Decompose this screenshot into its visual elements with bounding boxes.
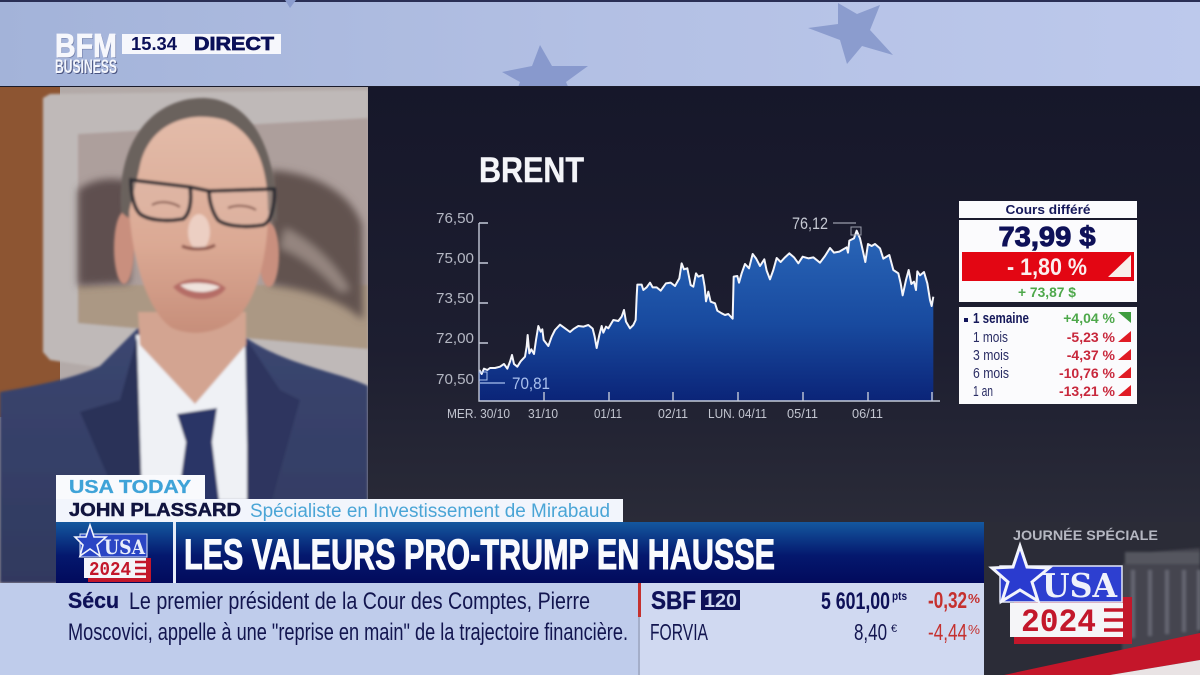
clock and live tag: 15.34 xyxy=(131,34,177,54)
small USA 2024 logo: USA xyxy=(104,535,145,559)
panel: quote widget xyxy=(959,201,1137,404)
callout: high 76,12: 76,12 xyxy=(792,214,828,233)
speaker hair xyxy=(121,98,277,222)
lower third: speaker name: Spécialiste en Investissement de Mirabaud xyxy=(250,501,610,522)
y axis labels: 72,00 xyxy=(436,330,474,347)
wood wall xyxy=(0,87,60,417)
widget header xyxy=(959,201,1137,218)
large USA 2024 logo xyxy=(992,546,1132,644)
widget performance table: 1 semaine xyxy=(973,311,1029,327)
panel: special edition block xyxy=(984,522,1200,675)
speaker ears xyxy=(114,212,134,284)
widget performance table: 6 mois xyxy=(973,366,1009,382)
widget performance table: +4,04 % xyxy=(1063,310,1116,326)
speaker lapels xyxy=(81,338,143,475)
speaker glasses xyxy=(131,180,274,226)
panel: news ticker xyxy=(0,583,640,675)
x axis labels: 31/10 xyxy=(528,406,558,421)
headline text: LES VALEURS PRO-TRUMP EN HAUSSE xyxy=(184,531,775,579)
x axis labels: 06/11 xyxy=(852,406,883,421)
panel: speaker video xyxy=(0,87,368,583)
price area xyxy=(479,231,933,401)
panel: stock ticker: -0,32 xyxy=(928,587,967,613)
lower third: USA TODAY tag xyxy=(56,475,205,499)
speaker neck xyxy=(138,312,246,404)
clock and live tag: DIRECT xyxy=(194,34,274,54)
BFM Business logo: BFM xyxy=(55,27,117,64)
large USA 2024 logo: 2024 xyxy=(1021,604,1096,641)
top banner background with stars xyxy=(0,0,1200,86)
panel: stock ticker: 8,40 xyxy=(854,619,887,645)
widget performance table: 1 mois xyxy=(973,330,1008,346)
BFM Business logo: BUSINESS xyxy=(55,57,117,78)
speaker eyes, nose and mouth xyxy=(152,202,256,210)
title: BRENT: BRENT xyxy=(479,151,584,190)
x axis labels: 05/11 xyxy=(787,406,818,421)
y axis labels: 70,50 xyxy=(436,371,474,388)
panel: stock ticker: -4,44 xyxy=(928,619,967,645)
small USA 2024 logo: 2024 xyxy=(89,559,131,581)
panel: news ticker: Le premier président de la Cour des Comptes, Pierre xyxy=(129,588,590,615)
lower third: USA TODAY tag: USA TODAY xyxy=(69,477,191,497)
x axis labels: 02/11 xyxy=(658,406,688,421)
lower third: speaker name: JOHN PLASSARD xyxy=(69,500,241,520)
widget performance table: -4,37 % xyxy=(1067,347,1116,363)
BFM Business logo xyxy=(55,27,118,79)
panel: stock ticker: FORVIA xyxy=(650,619,708,645)
widget price box: - 1,80 % xyxy=(1007,254,1087,281)
panel: stock ticker: 120 xyxy=(704,591,737,612)
panel: stock ticker: SBF xyxy=(651,587,696,615)
y axis labels xyxy=(436,210,474,388)
widget header: Cours différé xyxy=(1006,202,1090,217)
clock and live tag xyxy=(122,34,281,54)
widget performance table xyxy=(959,307,1137,404)
callout: low 70,81: 70,81 xyxy=(512,374,550,393)
y axis labels: 73,50 xyxy=(436,290,474,307)
panel: chart background xyxy=(368,87,1200,522)
widget price box: + 73,87 $ xyxy=(1018,284,1076,300)
widget performance table: 3 mois xyxy=(973,348,1009,364)
speaker face xyxy=(128,112,268,333)
widget performance table: -5,23 % xyxy=(1067,329,1116,345)
line and area chart: Brent price xyxy=(436,210,940,421)
x axis labels: MER. 30/10 xyxy=(447,406,510,421)
panel: stock ticker: pts xyxy=(892,589,907,603)
red diagonal stripe xyxy=(1004,633,1200,675)
speaker shirt xyxy=(136,335,248,500)
panel: stock ticker xyxy=(638,583,984,675)
panel: stock ticker: 5 601,00 xyxy=(821,588,890,615)
callout: low 70,81 xyxy=(479,372,550,393)
widget performance table: -10,76 % xyxy=(1059,365,1116,381)
widget performance table: -13,21 % xyxy=(1059,383,1116,399)
large USA 2024 logo: USA xyxy=(1042,566,1117,605)
widget price box xyxy=(959,220,1137,302)
y axis labels: 75,00 xyxy=(436,250,474,267)
small USA 2024 logo xyxy=(75,525,151,582)
panel: news ticker: Sécu xyxy=(68,588,119,613)
painting xyxy=(43,90,368,392)
speaker suit xyxy=(0,328,368,583)
y axis labels: 76,50 xyxy=(436,210,474,227)
callout: high 76,12 xyxy=(792,214,861,235)
x axis labels: 01/11 xyxy=(594,406,622,421)
x axis labels xyxy=(447,406,883,421)
price line xyxy=(479,231,933,374)
lower third: speaker name xyxy=(56,499,623,522)
panel: news ticker: Moscovici, appelle à une "reprise en main" de la trajectoire financière. xyxy=(68,619,628,646)
heading: Journée spéciale: JOURNÉE SPÉCIALE xyxy=(1013,527,1158,543)
speaker tie xyxy=(177,408,219,500)
panel: stock ticker: % xyxy=(968,622,980,637)
widget price box: 73,99 $ xyxy=(998,221,1096,252)
BFM Business logo: BFM xyxy=(56,28,118,65)
panel: stock ticker: % xyxy=(968,591,980,606)
widget performance table: 1 an xyxy=(973,384,993,400)
headline band xyxy=(56,522,984,583)
BFM Business logo: BUSINESS xyxy=(56,58,118,79)
x axis labels: LUN. 04/11 xyxy=(708,406,767,421)
panel: stock ticker: € xyxy=(891,623,897,635)
White House backdrop xyxy=(1122,548,1200,655)
